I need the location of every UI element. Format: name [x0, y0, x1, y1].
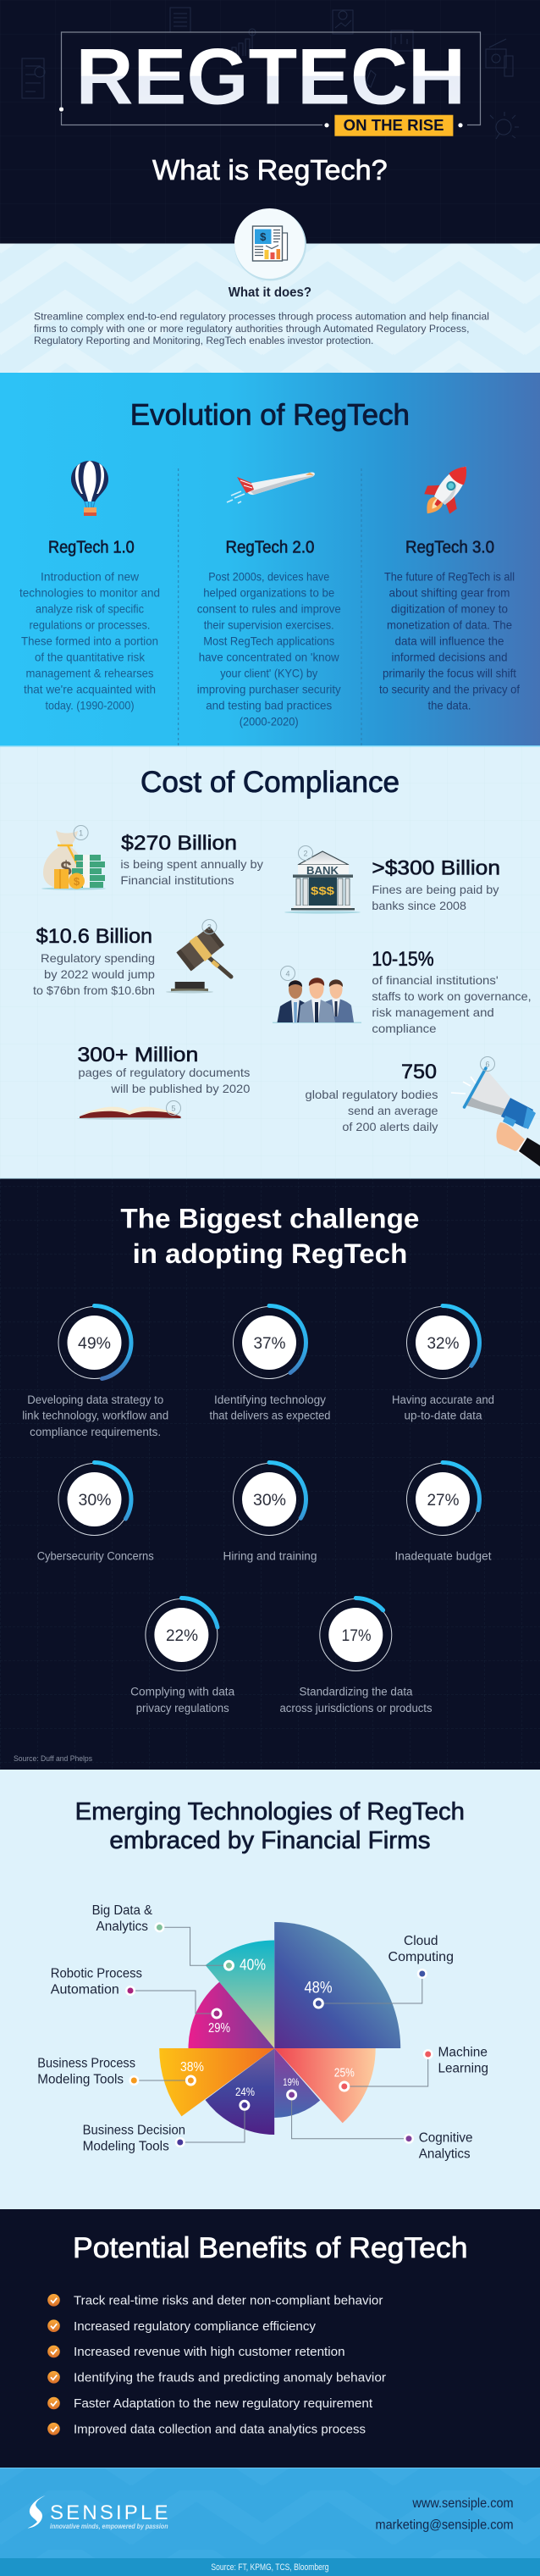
heading: potential benefits: Potential Benefits of RegTech	[73, 2232, 467, 2264]
chart: 30 percent cybersecurity: 30%	[78, 1492, 112, 1510]
legend: cloud computing: Cloud	[404, 1934, 438, 1948]
stat: 270 billion: $270 Billion	[121, 832, 237, 855]
heading: cost of compliance: Cost of Compliance	[141, 766, 399, 799]
text block: row 1 labels	[22, 1393, 494, 1438]
stat: 300 million	[78, 1044, 251, 1095]
logo: sensiple	[27, 2496, 168, 2530]
column: regtech 3.0: to security and the privacy of	[379, 683, 520, 696]
stat: 270 billion	[120, 832, 263, 887]
panel: emerging technologies	[0, 1770, 540, 2210]
stat: 750: 750	[401, 1061, 437, 1083]
heading: biggest challenge	[120, 1204, 419, 1269]
legend: business decision modeling: Business Decision	[83, 2123, 185, 2137]
stat: 300 billion: Fines are being paid by	[372, 883, 499, 896]
chart: pie: 19%	[283, 2076, 300, 2088]
column: regtech 3.0: monetization of data. The	[387, 618, 512, 632]
chart: 30 percent cybersecurity	[58, 1462, 131, 1537]
panel: header	[0, 0, 540, 244]
legend: machine learning: Learning	[438, 2062, 488, 2076]
column: regtech 3.0: primarily the focus will shift	[383, 667, 516, 680]
text block: description	[34, 310, 489, 346]
column: regtech 3.0: RegTech 3.0	[405, 539, 494, 557]
icon: money bag: $	[60, 857, 72, 880]
list: benefits: Faster Adaptation to the new regulatory requirement	[74, 2396, 373, 2411]
pie values and markers	[186, 1961, 349, 2109]
logo: sensiple: SENSIPLE	[50, 2501, 168, 2524]
text block: row 2 labels	[37, 1550, 492, 1563]
text block: row 1 labels: Having accurate and	[392, 1393, 494, 1406]
stat: 10.6 billion: Regulatory spending	[41, 951, 155, 965]
chart: 49 percent	[58, 1306, 131, 1379]
heading: what it does: What it does?	[229, 285, 311, 300]
chart: 27 percent	[406, 1462, 479, 1537]
icon: rocket	[414, 455, 481, 526]
contact details: marketing@sensiple.com	[376, 2518, 514, 2533]
stat: 270 billion: Financial institutions	[120, 873, 234, 887]
icons: check bullets	[47, 2294, 60, 2435]
text block: row 1 labels: Developing data strategy to	[27, 1393, 163, 1406]
legend: cognitive analytics: Cognitive	[419, 2130, 473, 2145]
column: regtech 2.0: your client' (KYC) by	[220, 667, 317, 680]
chart: 32 percent	[406, 1306, 479, 1379]
column: regtech 2.0: and testing bad practices	[206, 699, 332, 712]
stat: 750: global regulatory bodies	[305, 1088, 438, 1101]
stat: 300 million: pages of regulatory documents	[78, 1066, 250, 1079]
stat: 750: send an average	[348, 1104, 438, 1117]
icon: money bag: $	[74, 875, 80, 888]
text block: row 3 labels	[130, 1686, 433, 1715]
text block: description: Streamline complex end-to-end regulatory processes through process automation and help financial	[34, 310, 489, 322]
chart: 30 percent hiring: 30%	[253, 1492, 286, 1510]
legend: business decision modeling	[83, 2123, 185, 2153]
column: regtech 2.0: improving purchaser security	[197, 683, 341, 696]
column: regtech 1.0	[19, 539, 160, 712]
legend: machine learning: Machine	[438, 2046, 488, 2060]
legend: business process modeling: Business Process	[37, 2057, 135, 2071]
column: regtech 2.0	[197, 539, 341, 728]
column: regtech 1.0: that we're acquainted with	[24, 683, 156, 696]
stat: 10-15 percent	[372, 948, 532, 1035]
chart: 22 percent	[145, 1598, 218, 1672]
decorative faint icons	[22, 8, 519, 139]
text block: row 1 labels: Identifying technology	[214, 1393, 326, 1406]
heading: biggest challenge: in adopting RegTech	[133, 1238, 407, 1269]
legend: big data	[92, 1903, 164, 1934]
text block: row 1 labels: that delivers as expected	[210, 1410, 330, 1422]
icon: book: 5	[171, 1105, 176, 1113]
icon: people: 4	[285, 969, 290, 978]
column: regtech 3.0: the data.	[428, 699, 471, 712]
legend: business decision modeling: Modeling Tools	[83, 2139, 169, 2153]
contact details: www.sensiple.com	[411, 2496, 514, 2511]
text block: row 3 labels: privacy regulations	[136, 1702, 229, 1715]
logo: sensiple: innovative minds, empowered by passion	[50, 2522, 168, 2530]
chart: pie: 38%	[180, 2060, 204, 2075]
chart: 17 percent	[319, 1598, 393, 1672]
heading: evolution: Evolution of RegTech	[130, 399, 410, 432]
icon: airplane	[227, 472, 315, 503]
panel: biggest challenge	[0, 1177, 540, 1770]
stat: 750	[305, 1061, 438, 1133]
heading: biggest challenge: The Biggest challenge	[120, 1204, 419, 1234]
legend: cloud computing: Computing	[388, 1950, 454, 1964]
text block: row 2 labels: Inadequate budget	[394, 1550, 492, 1563]
source bar	[0, 2558, 540, 2576]
column: regtech 1.0: RegTech 1.0	[48, 539, 135, 557]
chart: 30 percent hiring	[232, 1462, 306, 1537]
text block: row 1 labels: up-to-date data	[405, 1410, 482, 1422]
chart: 17 percent: 17%	[342, 1627, 372, 1645]
column: regtech 2.0: (2000-2020)	[240, 715, 299, 728]
column: regtech 2.0: their supervision exercises.	[204, 618, 334, 632]
column: regtech 1.0: today. (1990-2000)	[46, 699, 134, 712]
chart: 37 percent	[232, 1306, 306, 1379]
title: REGTECH	[76, 32, 466, 121]
chart: pie: 40%	[240, 1957, 266, 1974]
list: benefits: Track real-time risks and deter non-compliant behavior	[74, 2294, 383, 2307]
chart: 37 percent: 37%	[254, 1335, 286, 1353]
stat: 300 million: will be published by 2020	[110, 1082, 251, 1095]
chart: 27 percent: 27%	[427, 1492, 460, 1510]
column: regtech 2.0: Post 2000s, devices have	[208, 570, 329, 584]
icon: bank: BANK	[306, 865, 339, 877]
stat: 300 billion: banks since 2008	[372, 899, 466, 912]
list: benefits: Identifying the frauds and predicting anomaly behavior	[74, 2370, 386, 2385]
heading: emerging technologies: embraced by Financial Firms	[109, 1827, 430, 1854]
column: regtech 3.0	[379, 539, 520, 712]
stat: 750: of 200 alerts daily	[342, 1120, 438, 1133]
source note: Source: Duff and Phelps	[14, 1754, 92, 1763]
column: regtech 1.0: management & rehearses	[25, 667, 154, 680]
column: regtech 2.0: RegTech 2.0	[225, 539, 314, 557]
chart: pie: 25%	[334, 2066, 355, 2080]
text block: row 3 labels: Complying with data	[130, 1686, 235, 1698]
chart: pie: 29%	[208, 2021, 230, 2036]
legend: big data: Analytics	[96, 1920, 148, 1934]
contact details	[376, 2496, 514, 2533]
icon: megaphone: 6	[485, 1061, 490, 1069]
icon: bank: $$$	[311, 885, 334, 897]
icon: people	[273, 966, 361, 1023]
icon: money bag	[41, 825, 106, 890]
stat: 10-15 percent: risk management and	[372, 1005, 494, 1019]
heading: emerging technologies	[75, 1798, 465, 1854]
list: benefits	[74, 2294, 386, 2436]
source bar: Source: FT, KPMG, TCS, Bloomberg	[211, 2562, 328, 2573]
legend: robotic process automation	[51, 1966, 142, 1997]
leader lines	[135, 1927, 428, 2142]
text block: row 3 labels: across jurisdictions or products	[279, 1702, 433, 1715]
stat: 10.6 billion: $10.6 Billion	[36, 925, 152, 948]
text block: row 2 labels: Hiring and training	[223, 1550, 317, 1563]
panel: cost of compliance	[0, 745, 540, 1178]
icon: book	[77, 1101, 182, 1120]
stat: 300 billion	[372, 857, 500, 912]
column: regtech 2.0: consent to rules and improve	[197, 602, 341, 616]
column: regtech 3.0: about shifting gear from	[389, 586, 510, 600]
column: regtech 3.0: digitization of money to	[391, 602, 508, 616]
icon: megaphone	[451, 1057, 540, 1166]
stat: 270 billion: is being spent annually by	[120, 857, 263, 871]
list: benefits: Increased revenue with high customer retention	[74, 2345, 345, 2359]
legend: machine learning	[423, 2046, 488, 2076]
legend: cognitive analytics: Analytics	[419, 2147, 471, 2161]
column: regtech 1.0: analyze risk of specific	[36, 602, 144, 616]
column: regtech 2.0: Most RegTech applications	[203, 634, 334, 648]
list: benefits: Increased regulatory compliance efficiency	[74, 2319, 316, 2334]
column: regtech 3.0: data will influence the	[394, 634, 504, 648]
stat: 300 billion: >$300 Billion	[372, 857, 500, 880]
panel: evolution of regtech	[0, 373, 540, 745]
chart: pie: 24%	[235, 2085, 255, 2098]
chart: 32 percent: 32%	[427, 1335, 460, 1353]
stat: 10-15 percent: of financial institutions'	[372, 973, 499, 987]
chart: 49 percent: 49%	[78, 1335, 111, 1353]
column: regtech 1.0: These formed into a portion	[21, 634, 158, 648]
text block: description: Regulatory Reporting and Monitoring, RegTech enables investor protection.	[34, 335, 373, 346]
legend: cloud computing	[388, 1934, 454, 1979]
legend: cognitive analytics	[404, 2130, 473, 2161]
stat: 10.6 billion: by 2022 would jump	[44, 967, 155, 981]
icon: bank	[284, 845, 361, 914]
legend: business process modeling	[37, 2057, 139, 2087]
column: regtech 2.0: helped organizations to be	[203, 586, 334, 600]
panel: potential benefits	[0, 2209, 540, 2468]
legend: business process modeling: Modeling Tools	[37, 2073, 124, 2087]
text block: row 3 labels: Standardizing the data	[300, 1686, 413, 1698]
stat: 10.6 billion: to $76bn from $10.6bn	[33, 983, 155, 997]
panel: footer	[0, 2468, 540, 2558]
title frame	[61, 32, 481, 125]
heading: emerging technologies: Emerging Technologies of RegTech	[75, 1798, 465, 1825]
chart: 22 percent: 22%	[166, 1627, 198, 1645]
icon: money bag: 1	[79, 828, 83, 837]
chart: pie: 48%	[305, 1980, 333, 1997]
legend: robotic process automation: Automation	[51, 1982, 119, 1997]
icon: bank: 2	[303, 849, 308, 857]
legend: big data: Big Data &	[92, 1903, 153, 1918]
icon: hot air balloon	[71, 461, 108, 516]
stat: 10-15 percent: 10-15%	[372, 948, 434, 971]
stat: 10-15 percent: staffs to work on governance,	[372, 989, 532, 1003]
badge: on the rise: ON THE RISE	[344, 116, 444, 134]
icon: gavel	[166, 920, 231, 993]
list: benefits: Improved data collection and data analytics process	[74, 2423, 366, 2436]
text block: row 1 labels: link technology, workflow and	[22, 1410, 168, 1422]
text block: row 2 labels: Cybersecurity Concerns	[37, 1550, 154, 1563]
panel: what it does	[0, 208, 540, 373]
heading: what is regtech: What is RegTech?	[152, 154, 388, 186]
column: regtech 2.0: have concentrated on 'know	[199, 651, 340, 664]
icon: report	[234, 208, 306, 281]
column: regtech 3.0: The future of RegTech is all	[384, 570, 515, 584]
column: regtech 1.0: Introduction of new	[41, 570, 140, 584]
legend: robotic process automation: Robotic Process	[51, 1966, 142, 1980]
stat: 300 million: 300+ Million	[78, 1044, 198, 1066]
column: regtech 1.0: of the quantitative risk	[35, 651, 146, 664]
stat: 10-15 percent: compliance	[372, 1022, 437, 1035]
text block: description: firms to comply with one or more regulatory authorities through Automated Regulatory Process,	[34, 323, 469, 335]
column: regtech 3.0: informed decisions and	[391, 651, 508, 664]
text block: row 1 labels: compliance requirements.	[30, 1426, 161, 1438]
chart: pie	[135, 1922, 428, 2142]
icon: gavel: 3	[207, 923, 212, 932]
column: regtech 1.0: technologies to monitor and	[19, 586, 160, 600]
icon: report: $	[260, 230, 267, 243]
column: regtech 1.0: regulations or processes.	[29, 618, 151, 632]
stat: 10.6 billion	[33, 925, 155, 997]
